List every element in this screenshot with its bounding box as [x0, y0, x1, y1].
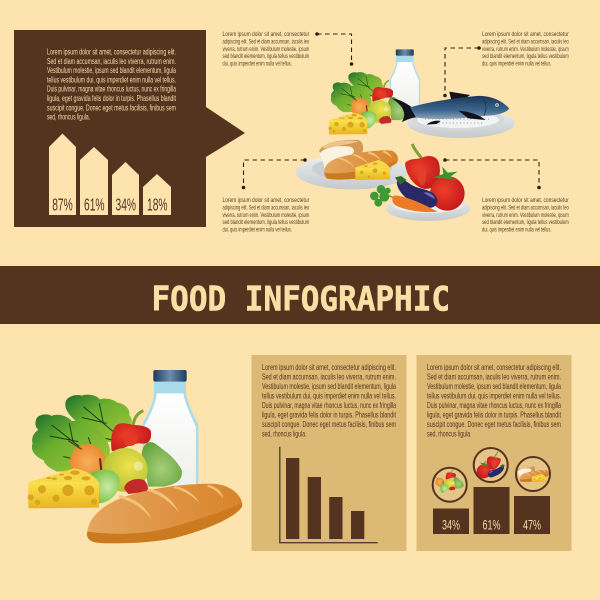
panel text [427, 363, 562, 438]
panel: brown intro callout [14, 30, 245, 227]
intro text block: tellus vestibulum dui, quis imperdiet enim nulla vel tellus. [47, 75, 176, 84]
panel text: suscipit congue. Donec eget metus facilisis, finibus sem [262, 420, 396, 429]
bar: 34% [433, 508, 469, 534]
icon: fruit circle [433, 468, 467, 502]
illustration: salad, milk and cheese [329, 49, 420, 134]
text block: top left [222, 32, 310, 68]
icon: bread circle [516, 457, 550, 491]
house bar chart: 87% [52, 195, 73, 215]
text block: lower right: dui, quis imperdiet enim nulla vel tellus. [482, 228, 552, 234]
icon: vegetable circle [474, 448, 508, 482]
panel: bar chart [252, 355, 406, 551]
connector: lower right [443, 158, 541, 189]
title banner [0, 266, 600, 324]
panel text: Lorem ipsum dolor sit amet, consectetur adipiscing elit. [262, 363, 396, 372]
connector: top right [443, 46, 481, 97]
panel text: ligula, eget gravida felis dolor in turpis. Phasellus blandit [262, 410, 397, 420]
intro text block: suscipit congue. Donec eget metus facilisis, finibus sem [47, 103, 176, 112]
panel text: sed, rhoncus ligula. [427, 430, 472, 438]
text block: lower left: adipiscing elit. Sed et diam accumsan, iaculis leo [222, 205, 310, 211]
text block: lower left: viverra, rutrum enim. Vestibulum molestie, ipsum [222, 213, 309, 219]
illustration: fish plate [392, 92, 515, 138]
text block: lower left: dui, quis imperdiet enim nulla vel tellus. [222, 228, 292, 234]
house bar chart: 18% [147, 195, 168, 215]
text block: top left: Lorem ipsum dolor sit amet, consectetur [222, 32, 309, 38]
intro text block: Lorem ipsum dolor sit amet, consectetur adipiscing elit. [47, 48, 176, 56]
text block: lower right [482, 198, 569, 234]
bar: 34%: 34% [442, 516, 460, 532]
text block: top left: viverra, rutrum enim. Vestibulum molestie, ipsum [222, 47, 309, 53]
illustration: bread plate [296, 140, 408, 190]
intro text block: Duis pulvinar, magna vitae rhoncus luctus, nunc ex fringilla [47, 85, 176, 94]
panel text: Vestibulum molestie, ipsum sed blandit elementum, ligula [262, 382, 396, 391]
panel text: tellus vestibulum dui, quis imperdiet enim nulla vel tellus. [262, 392, 396, 400]
text block: top left: dui, quis imperdiet enim nulla vel tellus. [222, 62, 292, 68]
intro text block: ligula, eget gravida felis dolor in turpis. Phasellus blandit [47, 94, 177, 103]
text block: top right: Lorem ipsum dolor sit amet, consectetur [482, 32, 569, 38]
illustration: large food group [28, 370, 242, 543]
house bar chart [49, 134, 171, 215]
intro text block [47, 48, 177, 122]
house bar chart: 34% [116, 195, 136, 215]
text block: lower right: Lorem ipsum dolor sit amet, consectetur [482, 198, 569, 204]
text block: top right: dui, quis imperdiet enim nulla vel tellus. [482, 62, 552, 68]
text block: top left: sed blandit elementum, ligula tellus vestibulum [222, 54, 309, 60]
illustration: vegetable plate [370, 144, 470, 221]
panel text: Sed et diam accumsan, iaculis leo viverra, rutrum enim. [262, 372, 396, 382]
panel: food percentages [416, 355, 572, 551]
bar: 47%: 47% [523, 516, 541, 532]
house bar chart: 61% [84, 195, 104, 215]
intro text block: Sed et diam accumsan, iaculis leo viverra, rutrum enim. [47, 57, 176, 66]
panel text: sed, rhoncus ligula. [262, 430, 306, 438]
bar: 47% [514, 496, 550, 534]
intro text block: sed, rhoncus ligula. [47, 113, 90, 122]
intro text block: Vestibulum molestie, ipsum sed blandit elementum, ligula [47, 66, 176, 75]
panel text [262, 363, 397, 438]
bar chart [280, 447, 378, 543]
text block: lower left: Lorem ipsum dolor sit amet, consectetur [222, 198, 309, 204]
text block: lower left [222, 198, 310, 234]
bar: 61%: 61% [482, 516, 500, 532]
text block: lower left: sed blandit elementum, ligula tellus vestibulum [222, 220, 309, 226]
bar: 61% [474, 487, 510, 534]
text block: top right [482, 32, 569, 68]
panel text: Duis pulvinar, magna vitae rhoncus luctus, nunc ex fringilla [262, 401, 396, 410]
title: FOOD INFOGRAPHIC [152, 280, 450, 320]
connector: top left [315, 32, 353, 66]
text block: top left: adipiscing elit. Sed et diam accumsan, iaculis leo [222, 39, 310, 45]
connector: lower left [242, 158, 307, 189]
